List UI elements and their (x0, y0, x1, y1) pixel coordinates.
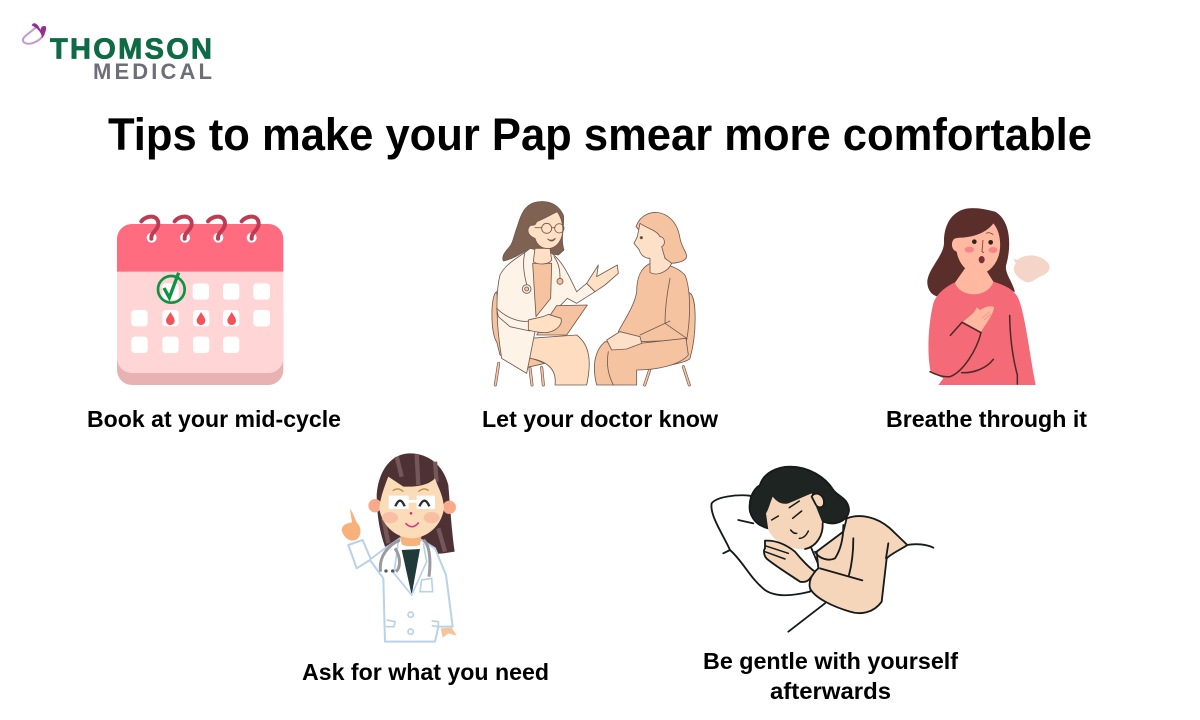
icon: woman breathing (927, 208, 1050, 385)
hand on chest (963, 306, 994, 332)
patient hair (636, 212, 686, 263)
label: be gentle with yourself afterwards (703, 648, 958, 704)
doctor sleeve and hand (497, 308, 530, 331)
hair (750, 467, 849, 535)
logo wordmark: Medical: MEDICAL (93, 59, 212, 84)
icon: doctor pointing up (342, 453, 457, 642)
doctor neck and face (533, 248, 552, 264)
sweater (928, 282, 1036, 385)
logo wordmark: Thomson: THOMSON (50, 34, 212, 66)
panel: breathe through it (886, 208, 1087, 432)
hand with pointing finger (342, 509, 361, 541)
label: let your doctor know: Let your doctor know (482, 406, 718, 432)
icon: doctor talking with patient (492, 202, 695, 385)
face (379, 477, 444, 538)
eyes, mouth (772, 501, 808, 538)
breath bubble (1013, 255, 1050, 282)
collar lines (386, 542, 438, 627)
panel: book at mid-cycle (87, 217, 341, 432)
doctor legs (530, 335, 589, 385)
coat (348, 538, 453, 642)
pillow (711, 495, 820, 595)
chairs (492, 292, 545, 368)
label: ask for what you need: Ask for what you need (302, 659, 549, 685)
clipboard (537, 305, 587, 335)
panel: be gentle with yourself (703, 467, 958, 704)
ears (368, 499, 382, 512)
label: breathe through it: Breathe through it (886, 406, 1087, 432)
stethoscope (380, 540, 430, 577)
ear (812, 494, 824, 507)
neck (955, 268, 993, 294)
patient body (618, 263, 690, 342)
other hand (441, 628, 457, 638)
icon: calendar (117, 217, 283, 385)
neck (400, 535, 422, 546)
doctor hair (503, 202, 564, 261)
doctor coat (497, 248, 595, 373)
logo: Thomson Medical (23, 23, 212, 84)
glasses (389, 496, 409, 509)
sweater lines (930, 315, 1017, 384)
label: be gentle with yourself afterwards: Be gentle with yourself (703, 648, 958, 674)
eyes, nose, brows (972, 239, 977, 244)
panel: let your doctor know (482, 202, 718, 432)
patient face (634, 223, 672, 274)
face (766, 493, 823, 549)
black shirt (402, 549, 420, 595)
title: Tips to make your Pap smear more comfortable (108, 109, 1092, 160)
hair (927, 208, 1015, 297)
stethoscope (524, 252, 560, 284)
patient legs (594, 338, 688, 385)
panel: ask for what you need (302, 453, 549, 685)
icon: butterfly (23, 23, 46, 44)
face (952, 223, 1000, 274)
hands (764, 541, 815, 582)
doctor shirt (533, 263, 552, 317)
body (810, 516, 907, 613)
label: book at your mid-cycle: Book at your mid-cycle (87, 406, 341, 432)
cheeks (965, 247, 974, 253)
label: be gentle with yourself afterwards: afterwards (770, 678, 891, 704)
icon: sleeping woman (711, 467, 933, 632)
hair back (377, 453, 455, 555)
patient hands (607, 332, 642, 350)
